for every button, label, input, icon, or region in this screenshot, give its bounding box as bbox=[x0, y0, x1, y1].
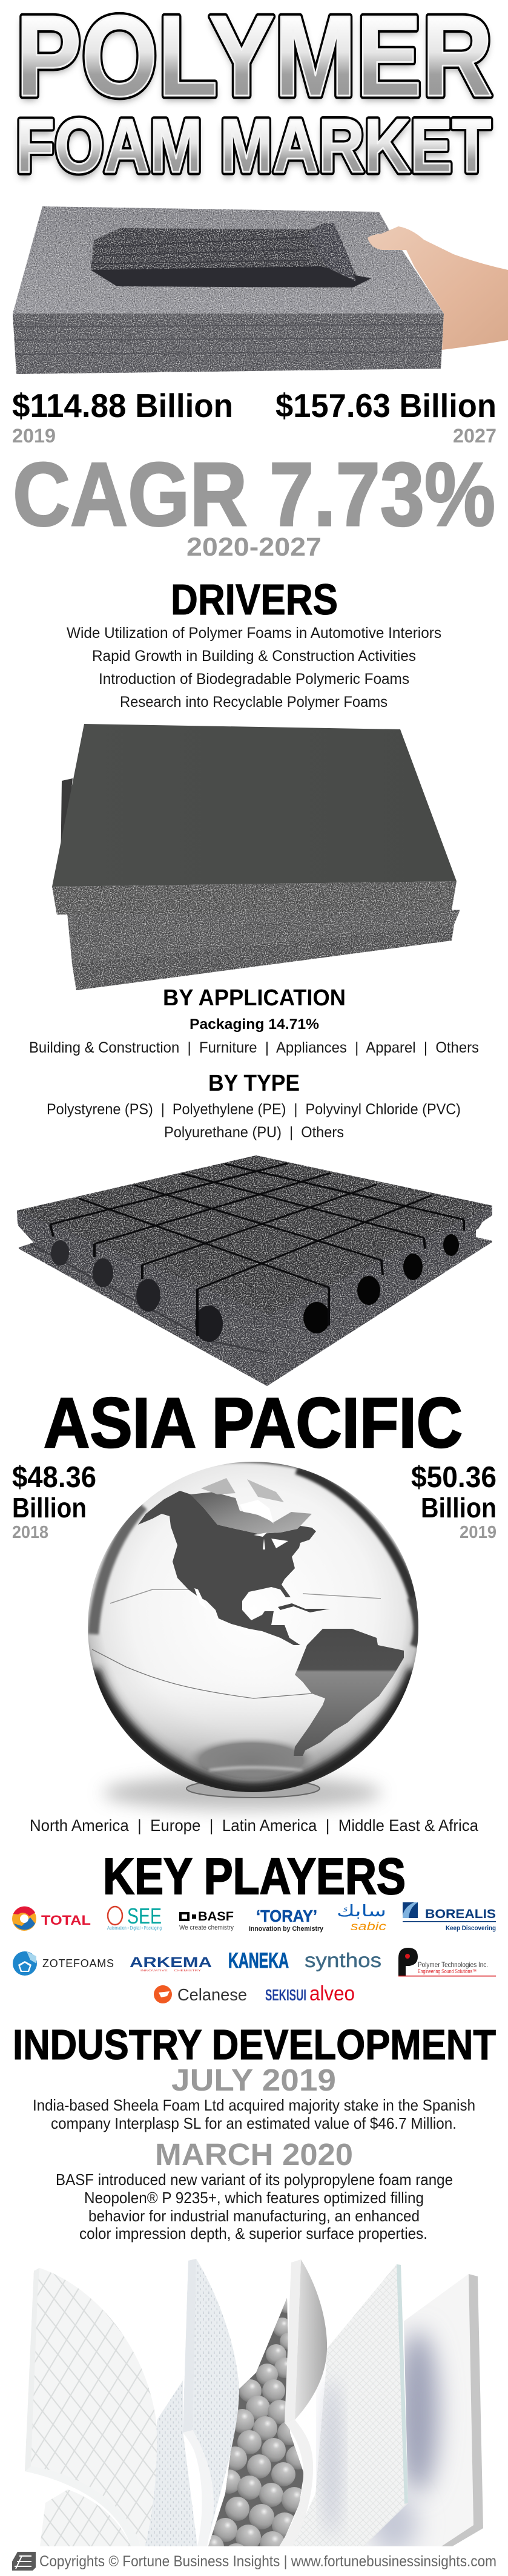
logo: Kaneka: KANEKA bbox=[228, 1949, 289, 1973]
stat: 2019 value bbox=[12, 387, 233, 447]
logo: Sabic bbox=[337, 1902, 387, 1933]
stat: 2027 value: 2027 bbox=[453, 425, 496, 447]
text: driver list bbox=[67, 625, 441, 711]
logo: Celanese: Celanese bbox=[177, 1985, 247, 2004]
logo: BASF bbox=[179, 1910, 234, 1931]
logo: Arkema: INNOVATIVE CHEMISTRY bbox=[140, 1969, 201, 1972]
logo: Toray: ‘TORAY’ bbox=[256, 1907, 317, 1925]
logo: Borealis: Keep Discovering bbox=[446, 1925, 496, 1932]
heading: drivers: DRIVERS bbox=[171, 576, 338, 624]
development: July 2019 bbox=[33, 2063, 475, 2132]
text: type segments: Polystyrene (PS) | Polyethylene (PE) | Polyvinyl Chloride (PVC) bbox=[47, 1101, 461, 1118]
development: March 2020: Neopolen® P 9235+, which features optimized filling bbox=[84, 2189, 424, 2207]
text: driver list: Introduction of Biodegradable Polymeric Foams bbox=[99, 671, 409, 688]
logo: SEE: SEE bbox=[127, 1904, 162, 1928]
logo: Total: TOTAL bbox=[41, 1913, 91, 1928]
CAGR headline: 2020-2027 bbox=[186, 533, 322, 562]
beads layer bbox=[208, 2299, 302, 2546]
icon: Fortune Business Insights mark bbox=[12, 2552, 36, 2571]
logo: Sekisui Alveo: SEKISUI bbox=[265, 1986, 306, 2004]
stat: 2027 value bbox=[275, 387, 496, 447]
heading: key players: KEY PLAYERS bbox=[103, 1848, 406, 1905]
development: March 2020: MARCH 2020 bbox=[155, 2137, 353, 2172]
logo: BASF: We create chemistry bbox=[179, 1924, 234, 1931]
stat: 2027 value: $157.63 Billion bbox=[275, 387, 496, 424]
development: July 2019: company Interplasp SL for an estimated value of $46.7 Million. bbox=[51, 2114, 457, 2132]
stat: 2019 regional value: $50.36 bbox=[411, 1461, 496, 1494]
logo: Sabic: sabic bbox=[351, 1920, 387, 1933]
heading: by application: BY APPLICATION bbox=[163, 985, 346, 1011]
text: application segments: Packaging 14.71% bbox=[190, 1016, 319, 1033]
development: March 2020: behavior for industrial manufacturing, an enhanced bbox=[88, 2207, 420, 2225]
logo: BASF: BASF bbox=[198, 1910, 234, 1924]
development: March 2020 bbox=[56, 2137, 453, 2242]
logo: Polymer Technologies: Polymer Technologies Inc. bbox=[418, 1960, 488, 1969]
image: glass globe bbox=[88, 1461, 418, 1810]
text: type segments bbox=[47, 1101, 461, 1141]
logo: Sekisui Alveo: alveo bbox=[309, 1982, 355, 2005]
text: type segments: Polyurethane (PU) | Others bbox=[164, 1124, 344, 1141]
logo: Toray: Innovation by Chemistry bbox=[249, 1925, 324, 1933]
logo: Arkema: ARKEMA bbox=[130, 1954, 212, 1971]
logo: Polymer Technologies bbox=[398, 1948, 496, 1977]
text: driver list: Rapid Growth in Building & Construction Activities bbox=[92, 648, 416, 665]
logo: Toray bbox=[249, 1907, 324, 1933]
logo: Borealis: BOREALIS bbox=[425, 1907, 496, 1921]
logo: Synthos: synthos bbox=[305, 1949, 381, 1971]
heading: by type: BY TYPE bbox=[208, 1071, 300, 1096]
text: application segments bbox=[29, 1016, 479, 1056]
logo: Polymer Technologies: Engineering Sound Solutions™ bbox=[418, 1968, 477, 1974]
text: application segments: Building & Construction | Furniture | Appliances | Apparel | Others bbox=[29, 1039, 479, 1056]
logo: Sekisui Alveo bbox=[265, 1982, 355, 2005]
stat: 2018 regional value bbox=[12, 1461, 96, 1542]
image: grid foam block bbox=[17, 1155, 492, 1386]
stat: 2018 regional value: Billion bbox=[12, 1492, 87, 1523]
stat: 2019 value: $114.88 Billion bbox=[12, 387, 233, 424]
text: driver list: Wide Utilization of Polymer Foams in Automotive Interiors bbox=[67, 625, 441, 642]
logo: Total bbox=[12, 1907, 91, 1931]
stat: 2018 regional value: $48.36 bbox=[12, 1461, 96, 1494]
stat: 2019 regional value: Billion bbox=[421, 1492, 496, 1523]
heading: asia pacific: ASIA PACIFIC bbox=[44, 1383, 463, 1462]
development: July 2019: India-based Sheela Foam Ltd acquired majority stake in the Spanish bbox=[33, 2096, 475, 2114]
development: March 2020: color impression depth, & superior surface properties. bbox=[79, 2224, 427, 2242]
stat: 2018 regional value: 2018 bbox=[12, 1523, 48, 1542]
title bbox=[16, 0, 493, 194]
image: layered foam panels bbox=[25, 2259, 483, 2568]
image: stacked foam sheets bbox=[52, 724, 460, 990]
logo: Sabic: سابك bbox=[337, 1902, 386, 1920]
text: other regions: North America | Europe | Latin America | Middle East & Africa bbox=[30, 1816, 479, 1835]
stat: 2019 regional value: 2019 bbox=[460, 1523, 496, 1542]
logo: Borealis bbox=[403, 1902, 496, 1932]
text: driver list: Research into Recyclable Polymer Foams bbox=[120, 694, 388, 711]
logo: SEE bbox=[107, 1904, 162, 1931]
development: March 2020: BASF introduced new variant of its polypropylene foam range bbox=[56, 2170, 453, 2189]
development: July 2019: JULY 2019 bbox=[171, 2063, 336, 2097]
stat: 2019 regional value bbox=[411, 1461, 496, 1542]
stat: 2019 value: 2019 bbox=[12, 425, 56, 447]
image: foam tray held by hand bbox=[13, 206, 508, 374]
logo: Zotefoams bbox=[13, 1951, 114, 1976]
logo: Zotefoams: ZOTEFOAMS bbox=[42, 1957, 114, 1970]
logo: SEE: Automation • Digital • Packaging bbox=[107, 1925, 162, 1931]
